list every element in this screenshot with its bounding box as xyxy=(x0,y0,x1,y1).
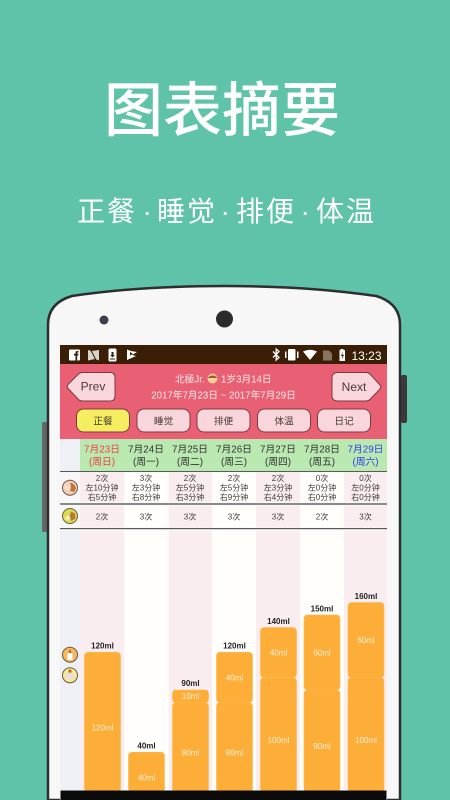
prev button: Prev xyxy=(81,380,105,394)
bar chart: 90ml xyxy=(313,742,331,751)
bar chart: 40ml xyxy=(138,774,155,782)
nursing row values: 左5分钟 xyxy=(176,482,204,492)
app screen xyxy=(60,345,387,800)
pink header xyxy=(60,364,387,439)
date header row: (周一) xyxy=(133,456,159,468)
table background columns xyxy=(60,439,387,790)
baby name and age: 1岁3月14日 xyxy=(221,372,272,386)
solids row values: 3次 xyxy=(272,512,284,522)
next button: Next xyxy=(342,380,367,394)
nursing row values: 左3分钟 xyxy=(132,482,160,492)
bar chart: 120ml xyxy=(91,642,114,650)
bar chart: 60ml xyxy=(357,636,375,645)
bar chart: 100ml xyxy=(355,736,377,745)
icon: bluetooth xyxy=(273,349,279,360)
date header row: 7月25日 xyxy=(172,444,208,456)
date header row: 7月23日 xyxy=(84,444,120,456)
nursing row values: 0次 xyxy=(316,473,328,483)
phone body xyxy=(42,286,407,800)
date header row xyxy=(80,439,387,471)
nursing row values: 右3分钟 xyxy=(176,492,204,502)
nursing row values: 右0分钟 xyxy=(351,492,380,502)
prev button xyxy=(67,372,115,401)
bar chart: 40ml xyxy=(226,674,243,682)
date header row: 7月29日 xyxy=(348,444,383,456)
nursing row values xyxy=(86,473,380,502)
date header row: (周二) xyxy=(177,456,203,468)
nursing row values: 右8分钟 xyxy=(132,492,160,502)
solids row values: 3次 xyxy=(228,512,240,522)
solids row values xyxy=(96,512,372,522)
date header row: (周六) xyxy=(352,456,379,468)
date header row: 7月26日 xyxy=(216,444,252,456)
nursing row values: 2次 xyxy=(228,473,240,483)
tab buttons: 睡觉 xyxy=(154,414,173,428)
nursing row values: 右0分钟 xyxy=(308,492,336,502)
nursing row values: 左3分钟 xyxy=(264,482,292,492)
row lines xyxy=(60,471,387,529)
bar chart: 80ml xyxy=(226,748,243,758)
nursing row values: 右5分钟 xyxy=(88,492,116,502)
date header row: 7月24日 xyxy=(128,444,164,456)
bar chart: 150ml xyxy=(311,604,333,614)
bar chart: 120ml xyxy=(92,724,114,732)
solids row values: 2次 xyxy=(316,512,328,522)
date header row: 7月27日 xyxy=(260,444,296,456)
nursing row values: 2次 xyxy=(272,473,284,483)
bottom black bar xyxy=(60,790,386,800)
nursing row values: 左0分钟 xyxy=(308,482,336,492)
bar chart: 140ml xyxy=(267,617,290,626)
nursing row values: 右9分钟 xyxy=(220,492,248,502)
bar chart: 120ml xyxy=(223,642,246,650)
solids row values: 3次 xyxy=(359,512,372,522)
tab buttons xyxy=(76,409,370,432)
tab buttons: 正餐 xyxy=(93,414,113,428)
baby name and age xyxy=(175,372,272,386)
icon: nursing xyxy=(62,480,78,495)
bar chart: 100ml xyxy=(268,736,290,745)
bar chart: 60ml xyxy=(313,648,331,658)
date header row: (周四) xyxy=(265,456,291,468)
status bar: 13:23 xyxy=(351,349,382,363)
icon: bottle xyxy=(62,647,78,662)
nursing row values: 3次 xyxy=(140,473,152,483)
date header row: 7月28日 xyxy=(304,444,340,456)
bar chart: 40ml xyxy=(270,648,287,658)
icon: formula xyxy=(62,668,78,683)
date header row: (周日) xyxy=(89,456,115,468)
bar chart: 10ml xyxy=(182,692,199,701)
nursing row values: 2次 xyxy=(96,473,108,483)
nursing row values: 左10分钟 xyxy=(86,482,118,492)
bar chart: 90ml xyxy=(181,679,200,688)
bar chart: 80ml xyxy=(182,748,199,758)
bar chart xyxy=(84,592,384,792)
nursing row values: 右4分钟 xyxy=(264,492,292,502)
subtitle: 正餐·睡觉·排便·体温 xyxy=(77,196,374,227)
bar chart: 160ml xyxy=(355,592,377,601)
tab buttons: 体温 xyxy=(274,416,294,428)
nursing row values: 2次 xyxy=(184,473,196,483)
icon: pumped xyxy=(62,508,78,524)
baby name and age: 北極Jr. xyxy=(175,372,205,386)
tab buttons: 排便 xyxy=(214,414,233,428)
status bar xyxy=(60,345,387,364)
tab buttons: 日记 xyxy=(334,416,354,428)
solids row values: 2次 xyxy=(96,512,108,522)
date header row: (周五) xyxy=(309,456,335,468)
solids row values: 3次 xyxy=(140,512,152,522)
icon: vibrate xyxy=(285,349,298,360)
nursing row values: 0次 xyxy=(359,473,372,483)
date header row: (周三) xyxy=(221,456,247,468)
solids row values: 3次 xyxy=(184,512,196,522)
title: 图表摘要 xyxy=(104,78,340,144)
date range: 2017年7月23日 ~ 2017年7月29日 xyxy=(151,388,296,402)
bar chart: 40ml xyxy=(137,742,156,750)
nursing row values: 左5分钟 xyxy=(220,482,248,492)
nursing row values: 左0分钟 xyxy=(351,482,380,492)
next button xyxy=(332,372,381,401)
